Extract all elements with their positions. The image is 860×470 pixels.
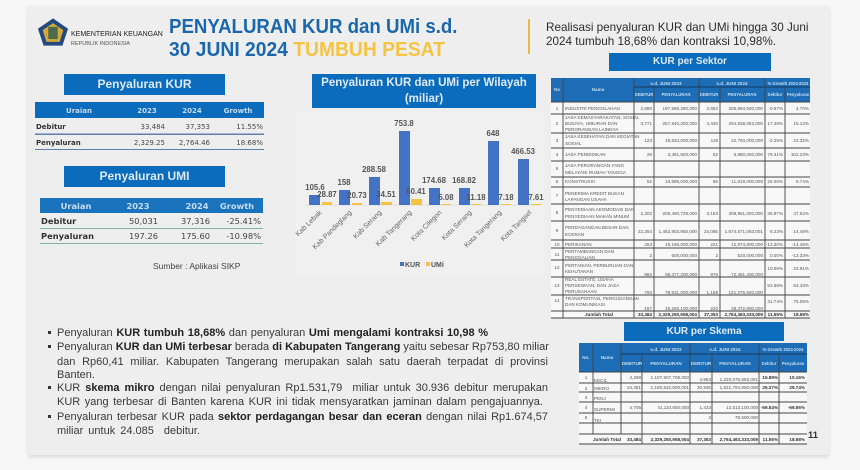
table: KUR per Skema: 11.55% (763, 437, 778, 442)
table: KUR per Sektor: 209,490,728,000 (662, 211, 697, 216)
table: KUR per Skema: 24,481 (627, 385, 641, 390)
logo text: KEMENTERIAN KEUANGAN (71, 31, 163, 38)
table: KUR per Sektor: 220 (710, 306, 718, 311)
table: KUR per Sektor: REAL ESTATE, USAHA (565, 277, 615, 282)
bullet points (48, 327, 549, 437)
bar chart: KUR and UMi per wilayah: 158 (337, 178, 351, 187)
table: Penyaluran KUR: Debitur (36, 123, 66, 131)
table: KUR per Sektor: 15,166,000,000 (665, 242, 697, 247)
table: KUR per Sektor: 75.05% (793, 299, 809, 304)
logo text (71, 31, 163, 47)
title (169, 15, 457, 61)
table: KUR per Skema: 4,298 (630, 375, 641, 380)
bar chart: KUR and UMi per wilayah: 753.8 (394, 119, 414, 128)
bullet points: Penyaluran KUR dan UMi terbesar berada di Kabupaten Tangerang yaitu sebesar Rp753,80 miliar (57, 341, 549, 353)
bar chart: KUR and UMi per wilayah: 105.6 (305, 183, 325, 192)
summary text: 2024 tumbuh 18,68% dan kontraksi 10,98%. (546, 35, 776, 48)
table: KUR per Sektor: 22,254 (638, 229, 652, 234)
table: KUR per Sektor: Debitur (768, 92, 783, 97)
table: KUR per Sektor: 6 (556, 179, 559, 184)
table: KUR per Skema: 1,531,794,850,008 (720, 385, 758, 390)
bar chart: KUR and UMi per wilayah: Kab Pandeglang (312, 209, 353, 251)
table: KUR per Sektor: 11 (555, 252, 560, 257)
table: KUR per Sektor: 10.66% (767, 266, 783, 271)
table: KUR per Skema: 3 (585, 395, 588, 400)
bar chart: KUR and UMi per wilayah: 648 (486, 129, 500, 138)
table: KUR per Skema: 4 (585, 405, 588, 410)
table: KUR per Sektor: 79.31% (767, 152, 783, 157)
table: KUR per Sektor: 8.74% (796, 179, 809, 184)
table: KUR per Skema: s.d. JUNI 2023 (650, 347, 682, 352)
table: KUR per Sektor: 206,894,500,000 (728, 106, 763, 111)
table: KUR per Sektor: 760 (644, 290, 652, 295)
table: KUR per Skema: 1,107,507,708,003 (651, 375, 689, 380)
table: KUR per Skema: 26.37% (762, 385, 778, 390)
table: KUR per Sektor: PENYALURAN (662, 92, 690, 97)
table: Penyaluran KUR: 2024 (182, 107, 202, 115)
table: KUR per Sektor: 52 (647, 179, 652, 184)
table: KUR per Skema: 1,433 (700, 405, 711, 410)
bullet points: KUR yang terbesar di Banten karena KUR ini tidak mensyaratkan jaminan dalam pengajuannya. (57, 396, 543, 408)
heading: Penyaluran UMI: Penyaluran UMI (99, 169, 190, 183)
table: KUR per Sektor: 123 (644, 138, 652, 143)
table: KUR per Sektor: 600,000,000 (671, 253, 697, 258)
table: KUR per Sektor: s.d. JUNI 2023 (650, 81, 682, 86)
table: KUR per Sektor: 11.55% (768, 312, 783, 317)
table: KUR per Sektor: SOSIAL (565, 141, 582, 146)
table: KUR per Sektor: 24,085 (704, 229, 718, 234)
table: KUR per Sektor: 10,685,000,000 (665, 179, 697, 184)
table: KUR per Sektor: 294,838,053,000 (728, 121, 763, 126)
table: KUR per Sektor: -3.25% (768, 138, 783, 143)
table: KUR per Sektor: 308,961,000,000 (728, 211, 763, 216)
table: KUR per Skema: 2,764,463,333,009 (720, 437, 758, 442)
bullet points: miliar untuk 24.085 debitur. (57, 425, 200, 437)
table: KUR per Sektor: 520,000,000 (737, 253, 763, 258)
table: KUR per Sektor: 3,153 (706, 211, 718, 216)
table: Penyaluran UMI: 175.60 (181, 231, 210, 241)
table: KUR per Sektor: 78,531,000,000 (665, 290, 697, 295)
table: KUR per Skema (579, 343, 807, 444)
table: KUR per Sektor: 976 (710, 272, 718, 277)
title: 30 JUNI 2024 TUMBUH PESAT (169, 38, 445, 61)
table: Penyaluran UMI: 2023 (126, 201, 150, 211)
table: Penyaluran UMI: -25.41% (226, 216, 261, 226)
table: Penyaluran UMI: -10.98% (226, 231, 261, 241)
bar chart: KUR and UMi per wilayah: 7.61 (528, 193, 544, 202)
table: KUR per Sektor: 882 (644, 272, 652, 277)
table: Penyaluran UMI: 197.26 (129, 231, 158, 241)
table: Penyaluran UMI: Debitur (41, 216, 77, 226)
table: KUR per Sektor: No (554, 87, 560, 92)
table: Penyaluran KUR: 2,329.25 (134, 139, 165, 147)
table: KUR per Sektor: 2 (649, 253, 652, 258)
bar chart: KUR and UMi per wilayah: 11.18 (466, 193, 486, 202)
table: KUR per Sektor: PENGGALIAN (565, 255, 595, 260)
table: KUR per Sektor: 31.74% (767, 299, 783, 304)
table: KUR per Sektor: PERORANGAN LAINNYA (565, 127, 619, 132)
summary text (546, 21, 808, 48)
table: KUR per Sektor: 58,477,200,000 (665, 272, 697, 277)
heading: Penyaluran KUR: Penyaluran KUR (97, 77, 192, 91)
table: KUR per Sektor: 0.00% (770, 253, 783, 258)
table: Penyaluran KUR (35, 102, 264, 150)
table: KUR per Sektor: 25.00% (767, 179, 783, 184)
table: KUR per Sektor: JASA KESEHATAN DAN KEGIATAN (565, 134, 639, 139)
table: KUR per Sektor: 72,461,400,000 (731, 272, 763, 277)
table: KUR per Sektor: 253 (644, 242, 652, 247)
bar chart: KUR and UMi per wilayah: Kota Tangerang (464, 209, 503, 249)
table: KUR per Sektor: MELAYANI RUMAH TANGGA (565, 170, 627, 175)
table: KUR per Sektor: 17.48% (767, 121, 783, 126)
table: KUR per Skema: 29.74% (789, 385, 805, 390)
table: KUR per Sektor: PERIKANAN (565, 242, 592, 247)
table: KUR per Sektor: 36.97% (767, 211, 783, 216)
bar chart: KUR and UMi per wilayah: 168.82 (452, 176, 477, 185)
table: KUR per Sektor: 2 (715, 253, 718, 258)
bar chart: KUR and UMi per wilayah: 60.41 (406, 187, 426, 196)
table: KUR per Sektor: 54.43% (793, 283, 809, 288)
table: KUR per Skema: Debitur (762, 361, 777, 366)
table: KUR per Sektor: 52 (713, 152, 718, 157)
table: KUR per Sektor: 14 (554, 298, 560, 303)
table: KUR per Skema: 15.89% (762, 375, 778, 380)
table: KUR per Sektor: 4 (556, 152, 559, 157)
table: KUR per Sektor: KONSTRUKSI (565, 179, 595, 184)
table: KUR per Sektor: 5 (556, 166, 559, 171)
table: KUR per Sektor: PERUSAHAAN (565, 289, 597, 294)
table: Penyaluran KUR: 2,764.46 (179, 139, 211, 147)
table: KUR per Sektor: PENYALURAN (728, 92, 756, 97)
table: KUR per Skema: -69.54% (761, 405, 778, 410)
table: Penyaluran KUR: Uraian (66, 107, 92, 115)
table: KUR per Skema: 1 (585, 375, 588, 380)
bullet points: dan Rp60,41 miliar. Kabupaten Tangerang merupakan salah satu daerah terpadat di provinsi (57, 356, 548, 368)
table: KUR per Sektor: 7 (556, 193, 559, 198)
table: KUR per Skema: MIKRO (594, 386, 609, 391)
bar chart: KUR and UMi per wilayah: Kota Cilegon (410, 209, 443, 243)
table: KUR per Sektor: 257,840,200,000 (662, 121, 697, 126)
table: KUR per Skema: % Growth 2023-2024 (763, 347, 804, 352)
table: KUR per Sektor: KEHUTANAN (565, 269, 593, 274)
table: KUR per Sektor: PERTAMBANGAN DAN (565, 249, 614, 254)
table: KUR per Sektor: 53.68% (767, 283, 783, 288)
table: KUR per Sektor: 47.52% (793, 211, 809, 216)
table: KUR per Sektor: % Growth 2023-2024 (768, 81, 809, 86)
table: KUR per Sektor: 10 (554, 242, 560, 247)
bar chart: KUR and UMi per wilayah: Kab Lebak (295, 209, 324, 238)
table: KUR per Sektor: 18.68% (793, 312, 809, 317)
logo text: REPUBLIK INDONESIA (71, 41, 130, 47)
table: KUR per Sektor: 4,430 (706, 121, 718, 126)
bar chart: KUR and UMi per wilayah: 28.87 (317, 190, 337, 199)
table: KUR per Sektor: 2,764,463,333,009 (725, 312, 763, 317)
table: KUR per Sektor: Jumlah Total (585, 312, 613, 317)
table: KUR per Sektor: 3,771 (640, 121, 652, 126)
table: Penyaluran KUR: Penyaluran (36, 139, 81, 147)
table: Penyaluran UMI: 2024 (185, 201, 209, 211)
table: KUR per Sektor: 37,353 (704, 312, 718, 317)
bar chart: KUR and UMi per wilayah: 288.58 (362, 165, 387, 174)
divider (528, 19, 530, 54)
table: KUR per Sektor: DAN KOMUNIKASI (565, 302, 605, 307)
table: Penyaluran KUR: 37,353 (186, 123, 210, 131)
table: Penyaluran KUR: 11.55% (236, 123, 263, 131)
table: KUR per Sektor: 167 (644, 306, 652, 311)
table: KUR per Sektor: 28,472,800,000 (731, 306, 763, 311)
table: Penyaluran UMI: 50,031 (129, 216, 158, 226)
table: KUR per Sektor: 1,462,803,950,000 (659, 229, 697, 234)
table: KUR per Sektor: DEBITUR (635, 92, 653, 97)
table: KUR per Sektor: -14.45% (792, 242, 809, 247)
table: Penyaluran UMI (40, 198, 263, 244)
table: KUR per Sektor: PERSEWAAN, DAN JASA (565, 283, 620, 288)
table: KUR per Sektor: 22.32% (793, 138, 809, 143)
bar chart: KUR and UMi per wilayah: Kota Tangsel (500, 209, 534, 243)
table: Penyaluran UMI: 37,316 (181, 216, 210, 226)
bullet points: KUR skema mikro dengan nilai penyaluran Rp1.531,79 miliar untuk 30.936 debitur merupakan (57, 382, 548, 394)
table: KUR per Sektor: 12 (554, 265, 560, 270)
heading: Penyaluran UMI (64, 166, 225, 187)
table: KUR per Sektor: 3,451,500,000 (668, 152, 697, 157)
table: KUR per Sektor: 119 (711, 138, 718, 143)
table: KUR per Sektor: 33,484 (638, 312, 652, 317)
table: KUR per Sektor: 1,674,571,083,001 (725, 229, 763, 234)
bar chart: KUR and UMi per wilayah: KUR (405, 262, 420, 269)
bar chart: KUR and UMi per wilayah: 34.51 (376, 190, 396, 199)
table: KUR per Sektor: 29 (647, 152, 652, 157)
table: KUR per Skema: 18.68% (789, 437, 805, 442)
table: KUR per Skema: KECIL (594, 378, 608, 383)
bar chart: KUR and UMi per wilayah: Kota Serang (441, 209, 473, 242)
table: KUR per Sektor: Nama (592, 87, 605, 92)
table: KUR per Skema: 4,705 (630, 405, 641, 410)
table: KUR per Sektor: 18,634,000,000 (665, 138, 697, 143)
table: KUR per Skema: 30,936 (697, 385, 711, 390)
table: KUR per Sektor: 221 (710, 242, 718, 247)
table: KUR per Sektor: 121,276,500,000 (728, 290, 763, 295)
table: KUR per Skema: PENJ (594, 396, 606, 401)
table: KUR per Sektor: 22,793,000,000 (731, 138, 763, 143)
table: KUR per Sektor: PENERIMA KREDIT BUKAN (565, 191, 624, 196)
table: KUR per Sektor: -0.97% (768, 106, 783, 111)
page number: 11 (808, 430, 818, 441)
table: KUR per Sektor: 102.23% (791, 152, 809, 157)
table: KUR per Sektor: INDUSTRI PENGOLAHAN (565, 106, 620, 111)
heading: wilayah chart (312, 74, 536, 108)
table: KUR per Sektor: 65 (713, 179, 718, 184)
heading: KUR per Skema (624, 322, 784, 341)
table: KUR per Sektor: 15.12% (793, 121, 809, 126)
table: KUR per Skema: s.d. JUNI 2024 (709, 347, 741, 352)
table: KUR per Sektor: 1 (556, 106, 559, 111)
table: KUR per Sektor: LAPANGAN USAHA (565, 197, 608, 202)
summary text: Realisasi penyaluran KUR dan UMi hingga 30 Juni (546, 21, 808, 34)
table: KUR per Sektor: 2,862 (706, 106, 718, 111)
table: KUR per Skema: 4,983 (700, 377, 711, 382)
heading: Penyaluran KUR (64, 74, 225, 95)
table: KUR per Skema: 1,180,632,600,001 (651, 385, 689, 390)
table: KUR per Sektor: JASA PENDIDIKAN (565, 152, 606, 157)
table: Penyaluran KUR: Growth (224, 107, 252, 115)
table: KUR per Sektor: s.d. JUNI 2024 (716, 81, 748, 86)
table: KUR per Skema: Nama (601, 355, 614, 360)
heading: KUR per Sektor: KUR per Sektor (653, 56, 727, 67)
table: KUR per Sektor: 2,302 (640, 211, 652, 216)
source note: Sumber : Aplikasi SIKP (153, 261, 240, 271)
table: KUR per Skema: 33,484 (627, 437, 641, 442)
table: KUR per Skema: 2,329,250,958,004 (651, 437, 689, 442)
table: KUR per Sektor: 12,974,800,000 (731, 242, 763, 247)
bullet points: Banten. (57, 369, 95, 381)
bullet points: Penyaluran terbesar KUR pada sektor perdagangan besar dan eceran dengan nilai Rp1.674,57 (57, 411, 548, 423)
table: KUR per Sektor: 11,619,000,000 (731, 179, 763, 184)
bar chart: KUR and UMi per wilayah: 20.73 (347, 191, 367, 200)
heading: KUR per Skema: KUR per Skema (666, 326, 742, 337)
table: KUR per Sektor: PERTANIAN, PERBURUAN DAN (565, 263, 633, 268)
table: KUR per Sektor (551, 78, 810, 318)
title: PENYALURAN KUR dan UMi s.d. (169, 15, 457, 38)
table: KUR per Skema: 79,500,000 (735, 415, 758, 420)
table: KUR per Sektor: 9 (556, 228, 559, 233)
table: KUR per Skema: Penyaluran (782, 361, 805, 366)
table: Penyaluran KUR: 2023 (137, 107, 157, 115)
logo (38, 18, 68, 46)
table: KUR per Sektor: 2,890 (640, 106, 652, 111)
table: KUR per Skema: 12,513,100,000 (726, 405, 758, 410)
table: KUR per Skema: 10.16% (789, 375, 805, 380)
table: KUR per Skema: PENYALURAN (650, 361, 682, 366)
table: KUR per Sektor: 16,265,100,000 (665, 306, 697, 311)
table: Penyaluran KUR: 33,484 (140, 123, 166, 131)
bar chart: KUR and UMi per wilayah: 466.53 (511, 147, 536, 156)
table: KUR per Skema: -69.56% (788, 405, 805, 410)
table: KUR per Skema: 37,353 (697, 437, 711, 442)
heading: wilayah chart: Penyaluran KUR dan UMi per Wilayah (321, 77, 527, 89)
table: KUR per Sektor: 8.23% (770, 229, 783, 234)
table: KUR per Skema: Jumlah Total (593, 437, 621, 442)
table: KUR per Sektor: -13.33% (792, 253, 809, 258)
heading: wilayah chart: (miliar) (405, 93, 443, 105)
table: KUR per Skema: DEBITUR (622, 361, 643, 366)
table: KUR per Skema: 2 (585, 386, 588, 391)
table: KUR per Skema: SUPERMI (594, 407, 615, 412)
table: KUR per Sektor: BUDAYA, HIBURAN DAN (565, 121, 617, 126)
table: KUR per Skema: 1,220,075,883,001 (720, 377, 758, 382)
table: Penyaluran UMI: Penyaluran (41, 231, 94, 241)
table: KUR per Sektor: 4.70% (796, 106, 809, 111)
bar chart: KUR and UMi per wilayah: Kab Serang (352, 209, 383, 241)
bar chart: KUR and UMi per wilayah: UMi (431, 262, 444, 269)
table: Penyaluran KUR: 18.68% (236, 139, 263, 147)
bar chart: KUR and UMi per wilayah: 7.18 (498, 193, 514, 202)
table: KUR per Sektor: 2,329,250,958,004 (659, 312, 697, 317)
table: KUR per Sektor: 197,588,280,000 (662, 106, 697, 111)
table: KUR per Sektor: 23.91% (793, 266, 809, 271)
table: KUR per Sektor: PENYEDIAAN MAKAN MINUM (565, 214, 629, 219)
table: KUR per Skema: 3 (708, 415, 711, 420)
table: KUR per Skema: 5 (585, 415, 588, 420)
table: KUR per Sektor: PERDAGANGAN BESAR DAN (565, 225, 629, 230)
table: KUR per Sektor: TRANSPORTASI, PERGUDANGAN (565, 296, 639, 301)
table: KUR per Skema: TKI (594, 418, 601, 423)
bar chart: KUR and UMi per wilayah: 5.08 (438, 193, 454, 202)
table: KUR per Sektor: PENYEDIAAN AKOMODASI DAN (565, 207, 634, 212)
table: KUR per Sektor: JASA PERORANGAN YANG (565, 163, 624, 168)
bar chart: KUR and UMi per wilayah (295, 119, 544, 269)
table: KUR per Sektor: 6,980,000,000 (734, 152, 763, 157)
heading: KUR per Sektor (609, 53, 771, 71)
table: KUR per Sektor: JASA KEMASYARAKATAN, SOSIAL (565, 115, 640, 120)
table: KUR per Skema: No. (582, 355, 590, 360)
table: KUR per Sektor: 3 (556, 138, 559, 143)
table: KUR per Skema: 41,110,650,000 (657, 405, 689, 410)
table: KUR per Sektor: 8 (556, 210, 559, 215)
table: KUR per Sektor: ECERAN (565, 232, 584, 237)
table: KUR per Sektor: 13 (554, 283, 560, 288)
table: KUR per Sektor: -12.30% (766, 242, 783, 247)
table: KUR per Sektor: 2 (556, 121, 559, 126)
bar chart: KUR and UMi per wilayah: Kab Tangerang (375, 209, 413, 248)
bullet points: Penyaluran KUR tumbuh 18,68% dan penyaluran Umi mengalami kontraksi 10,98 % (57, 327, 488, 339)
table: Penyaluran UMI: Growth (220, 201, 254, 211)
table: Penyaluran UMI: Uraian (61, 201, 91, 211)
table: KUR per Skema: DEBITUR (691, 361, 712, 366)
table: KUR per Sektor: DEBITUR (700, 92, 718, 97)
table: KUR per Sektor: 14.48% (793, 229, 809, 234)
table: KUR per Skema: PENYALURAN (719, 361, 751, 366)
table: KUR per Sektor: 1,168 (706, 290, 718, 295)
bar chart: KUR and UMi per wilayah: 174.68 (422, 176, 447, 185)
table: KUR per Sektor: Penyaluran (787, 92, 810, 97)
